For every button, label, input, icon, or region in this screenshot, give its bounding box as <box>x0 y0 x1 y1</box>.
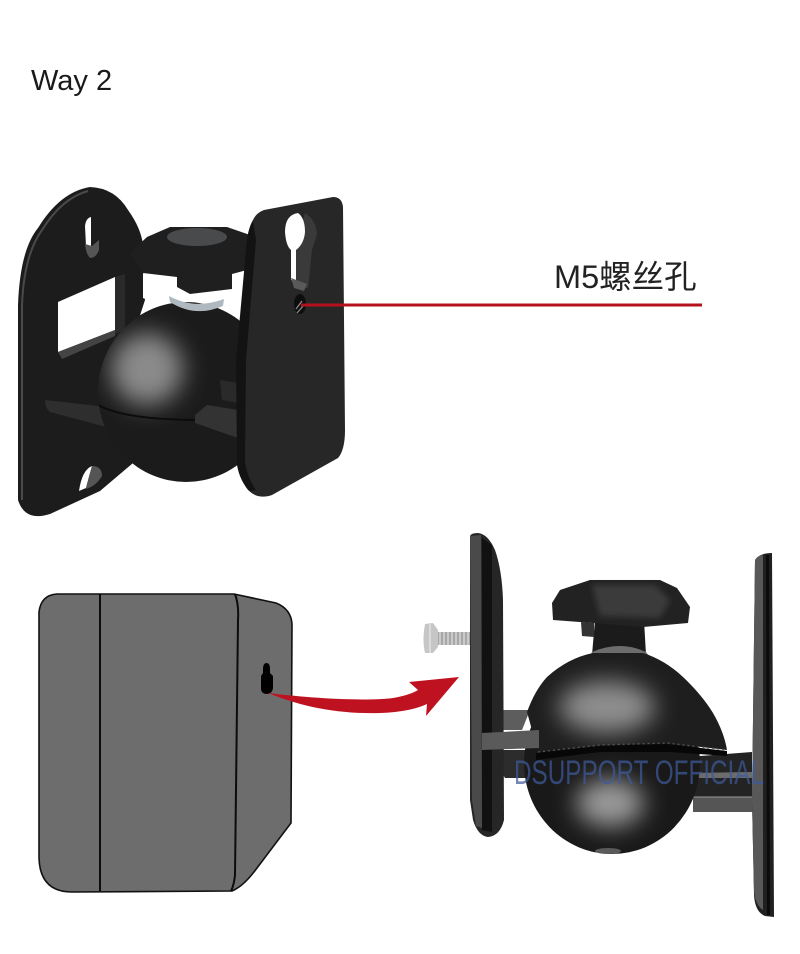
arm right <box>687 752 753 812</box>
M5 label: M5螺丝孔 <box>554 259 697 295</box>
keyhole <box>261 663 273 694</box>
white gaps around knob <box>143 273 172 300</box>
right plate <box>752 553 774 917</box>
left plate <box>470 533 504 837</box>
front plate <box>236 197 345 497</box>
left arm <box>483 710 540 778</box>
red arrow <box>268 677 459 716</box>
side arm tabs <box>195 405 238 438</box>
title: Way 2 <box>31 65 112 97</box>
side bracket photo <box>470 533 774 917</box>
leader line <box>301 304 702 306</box>
back mounting plate <box>18 187 145 516</box>
M5 threaded hole <box>294 294 306 314</box>
knob neck <box>592 620 646 655</box>
bolt <box>424 623 471 653</box>
knob <box>130 227 250 294</box>
ball <box>524 653 727 854</box>
left arm clamp bar <box>482 730 539 750</box>
star knob <box>552 580 690 637</box>
speaker back diagram <box>39 594 292 892</box>
top bracket photo <box>18 187 345 516</box>
ball joint <box>99 296 240 482</box>
